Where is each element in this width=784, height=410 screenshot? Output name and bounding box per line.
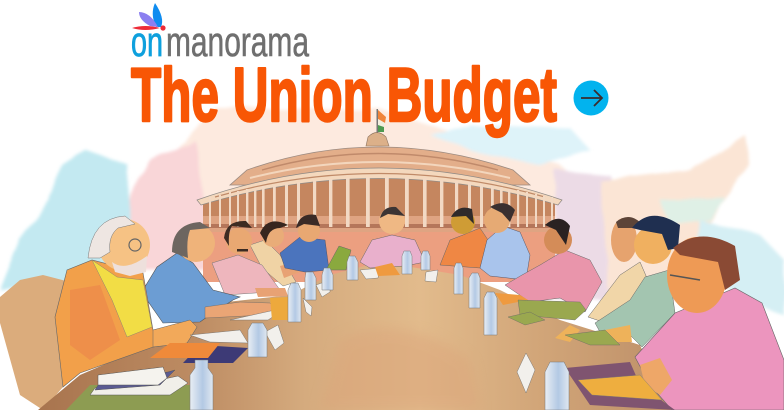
- chair: [0, 275, 70, 410]
- wall: [203, 175, 555, 272]
- person: centre pink shirt: [360, 207, 425, 268]
- person: pale blue shirt: [480, 203, 530, 280]
- parliament building: [197, 109, 562, 282]
- table reddish highlights: [320, 329, 480, 410]
- person: cream shirt behind: [588, 217, 650, 325]
- watercolor background washes: [0, 108, 784, 315]
- person: navy blue shirt: [280, 215, 329, 272]
- people: centre group: [360, 203, 530, 280]
- table items: [66, 251, 675, 410]
- folder under blue-shirt man: [270, 297, 288, 320]
- orange papers: [375, 263, 528, 305]
- orange folder centre: [150, 343, 220, 358]
- title: The Union Budget: [131, 53, 557, 138]
- green folders right: [508, 300, 620, 345]
- person: green shirt: [555, 216, 680, 347]
- person: front pink shirt: [635, 236, 784, 410]
- green folder: [326, 246, 351, 270]
- logo wordmark on: on: [131, 18, 163, 65]
- people: far left group: [55, 215, 351, 387]
- navy mat: [183, 345, 248, 363]
- person: pink shirt with glasses: [505, 219, 602, 312]
- water bottles: [190, 251, 569, 410]
- person: blue shirt: [143, 222, 277, 323]
- upper drum: [230, 147, 530, 185]
- person: orange shirt: [440, 208, 488, 268]
- central dome: [366, 132, 389, 146]
- people: right group: [505, 216, 784, 410]
- green mat: [66, 385, 190, 410]
- flag: [376, 109, 386, 135]
- books: [90, 367, 188, 395]
- papers: [190, 268, 535, 393]
- icon: butterfly: [132, 3, 166, 31]
- table: [38, 262, 675, 410]
- logo wordmark manorama: manorama: [166, 18, 309, 65]
- icon: arrow button: [574, 80, 608, 116]
- purple mat and yellow envelope: [565, 362, 675, 410]
- logo: onmanorama: [131, 3, 309, 65]
- person: cream shirt: [250, 221, 300, 286]
- eave: [197, 168, 562, 205]
- columns: [209, 177, 553, 227]
- person: pink shirt: [212, 221, 288, 297]
- person: PM in saffron with yellow scarf: [55, 216, 197, 387]
